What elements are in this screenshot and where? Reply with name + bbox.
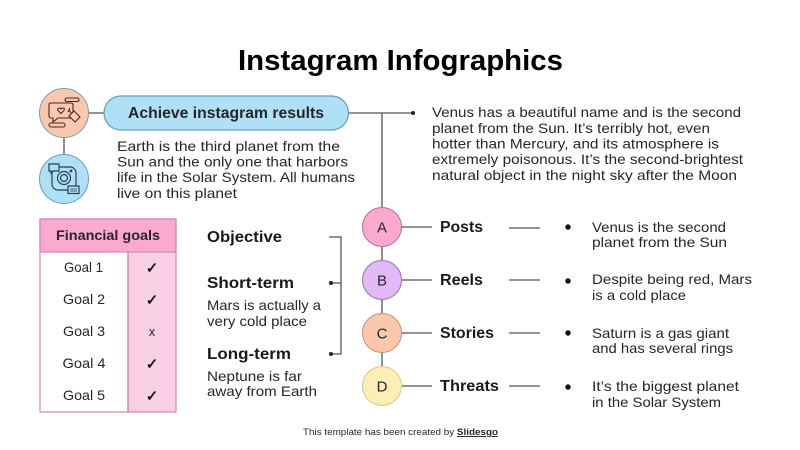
text block: earth bbox=[117, 138, 355, 201]
row descriptions: is a cold place bbox=[592, 287, 686, 303]
node B bbox=[362, 260, 402, 300]
icon: social media chat bbox=[40, 88, 88, 138]
table: financial goals: Financial goals bbox=[56, 227, 160, 243]
row descriptions: and has several rings bbox=[592, 340, 733, 356]
table: financial goals: Goal 3 bbox=[63, 323, 105, 339]
table: financial goals: ✓ bbox=[146, 259, 158, 277]
row descriptions bbox=[592, 219, 752, 410]
row labels: Threats bbox=[440, 378, 499, 395]
text block: earth: live on this planet bbox=[117, 185, 237, 201]
objective labels: Neptune is far bbox=[207, 368, 302, 384]
connector lines bbox=[64, 113, 540, 386]
text block: venus: natural object in the night sky after the Moon bbox=[432, 167, 737, 183]
node B: B bbox=[377, 272, 387, 290]
row descriptions: Despite being red, Mars bbox=[592, 271, 752, 287]
table: financial goals: ✓ bbox=[146, 387, 158, 405]
row labels bbox=[440, 219, 499, 395]
node A: A bbox=[377, 220, 387, 236]
row descriptions: Saturn is a gas giant bbox=[592, 325, 729, 341]
node D: D bbox=[377, 378, 388, 396]
row descriptions: planet from the Sun bbox=[592, 234, 727, 250]
objective labels: Short-term bbox=[207, 275, 294, 292]
title: Instagram Infographics bbox=[238, 45, 563, 77]
objective labels: very cold place bbox=[207, 313, 307, 329]
text block: venus: Venus has a beautiful name and is the second bbox=[432, 104, 741, 120]
node C: C bbox=[377, 326, 388, 342]
node D bbox=[362, 366, 402, 406]
node C bbox=[362, 314, 402, 352]
heading pill: achieve instagram results bbox=[104, 96, 348, 130]
row descriptions: in the Solar System bbox=[592, 394, 721, 410]
objective labels: Mars is actually a bbox=[207, 297, 321, 313]
table: financial goals: ✓ bbox=[146, 291, 158, 309]
table: financial goals: Goal 1 bbox=[64, 259, 103, 275]
row labels: Reels bbox=[440, 272, 483, 289]
heading pill: achieve instagram results: Achieve instagram results bbox=[128, 105, 324, 122]
text block: venus: planet from the Sun. It’s terribly hot, even bbox=[432, 120, 710, 136]
footer credit: This template has been created by Slidesgo bbox=[303, 427, 498, 438]
bullets bbox=[565, 224, 571, 390]
table: financial goals: Goal 2 bbox=[63, 291, 105, 307]
text block: earth: life in the Solar System. All humans bbox=[117, 169, 355, 185]
text block: venus: extremely poisonous. It’s the second-brightest bbox=[432, 151, 743, 167]
table: financial goals bbox=[40, 219, 176, 412]
text block: earth: Sun and the only one that harbors bbox=[117, 154, 348, 170]
row descriptions: It’s the biggest planet bbox=[592, 378, 739, 394]
objective labels: away from Earth bbox=[207, 383, 317, 399]
text block: venus: hotter than Mercury, and its atmosphere is bbox=[432, 136, 719, 152]
text block: earth: Earth is the third planet from the bbox=[117, 138, 340, 154]
objective labels bbox=[207, 229, 321, 399]
table: financial goals: Goal 5 bbox=[63, 387, 105, 403]
row labels: Stories bbox=[440, 325, 494, 342]
table: financial goals: ✓ bbox=[146, 355, 158, 373]
objective labels: Objective bbox=[207, 229, 282, 246]
row labels: Posts bbox=[440, 219, 483, 236]
icon: camera bbox=[40, 154, 88, 204]
row descriptions: Venus is the second bbox=[592, 219, 726, 235]
table: financial goals: Goal 4 bbox=[62, 355, 106, 371]
text block: venus bbox=[432, 104, 743, 183]
table: financial goals: x bbox=[149, 325, 156, 339]
objective labels: Long-term bbox=[207, 346, 291, 363]
node A bbox=[362, 208, 402, 246]
